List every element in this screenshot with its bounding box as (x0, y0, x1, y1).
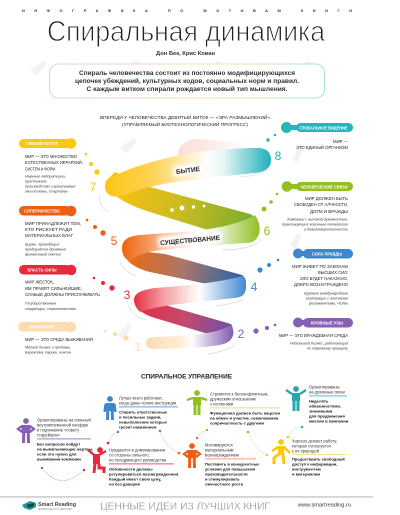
figure: green (187, 390, 207, 415)
panel: rivalry (5): предприятия дровяные (25, 248, 66, 252)
panel: human ties (6): МИР ДОЛЖЕН БЫТЬ (305, 196, 348, 202)
text: blue: и посильные задачи, (119, 414, 161, 420)
guide arrows (100, 168, 271, 354)
text: yellow: доступ к информации, (292, 462, 337, 466)
pill: СОПЕРНИЧЕСТВО (24, 208, 61, 214)
text: blue: когда даны четкие инструкции (119, 400, 176, 406)
logo: ЦЕННЫЕ ИДЕИ ИЗ ЛУЧШИХ КНИГ (38, 508, 73, 511)
panel: human ties (6) (282, 181, 353, 232)
numbers: 5 (111, 234, 118, 248)
text: green: на обмен и участие, немаловажна (210, 416, 279, 420)
panel: global vision (8) (281, 122, 353, 151)
text: green: Функционал должен быть нацелен (210, 410, 281, 416)
panel: human ties (6): и благотворительность (304, 228, 348, 232)
figure: teal (286, 386, 306, 411)
numbers: 3 (124, 288, 131, 302)
logo: Smart Reading (38, 502, 76, 508)
white dots (170, 205, 205, 212)
panel: power (3): ИМ ПРАВЯТ СИЛЬНЕЙШИЕ, (25, 284, 82, 292)
text: orange: Мотивируются (205, 442, 233, 448)
pill: ВЛАСТЬ СИЛЫ (28, 268, 56, 272)
text: teal: Наделять (309, 398, 329, 404)
text: purple: на выматывающие жертвы, (37, 446, 93, 452)
text: orange: и стимулировать (205, 476, 240, 482)
panel: flexible flow (7): престижное (25, 180, 47, 184)
ninth turn note: (УПРАВЛЯЕМЫЙ БИОТЕХНОЛОГИЧЕСКИЙ ПРОГРЕСС) (122, 120, 248, 128)
intro callout (50, 64, 324, 98)
text: yellow: инструментам (292, 466, 321, 472)
text: teal: для продвижения (309, 414, 346, 418)
numbers: 4 (251, 280, 258, 294)
text: orange: Поставить в конкурентные (205, 462, 260, 466)
label: being: БЫТИЕ (176, 166, 201, 176)
pill: СИЛА ПРАВДЫ (312, 252, 342, 256)
panel: power of truth (4): ВЫСШИХ СИЛ: (318, 270, 348, 276)
panel: power of truth (4) (292, 248, 353, 306)
text: red (109, 448, 179, 486)
text: green: сопричастность с другими (210, 420, 264, 426)
text: blue: грозит наказанием (119, 424, 157, 430)
panel: flexible flow (7): СИСТЕМ И ФОРМ (25, 166, 55, 172)
text: orange: вознаграждением (205, 452, 239, 458)
panel: power of truth (4): Крупные международные (304, 292, 348, 296)
text: red: регулироваться вознаграждением. (109, 472, 179, 476)
numbers (90, 149, 282, 354)
text: blue: Лучше всего работают, (119, 396, 163, 400)
title: Спиральная динамика (47, 16, 326, 48)
panel: rivalry (5): МИР ПРИНАДЛЕЖИТ ТЕМ, (25, 221, 81, 227)
pill: ГЛОБАЛЬНОЕ ВИДЕНИЕ (300, 126, 348, 130)
text: teal: миссии в компании (309, 418, 349, 424)
text: teal: Ориентированы (309, 384, 340, 390)
panel: power (3): структуры, строительство (25, 307, 76, 311)
panel: survival (1): Мелкий бизнес и продажа, (25, 346, 71, 350)
panel: power of truth (4): МИР ЖИВЕТ ПО ЗАКОНАМ (292, 264, 348, 270)
numbers: 2 (238, 327, 245, 341)
panel: rivalry (5): МАТЕРИАЛЬНЫХ БЛАГ (25, 233, 73, 239)
figure: blue (104, 396, 116, 420)
text: purple: внутриплеменной конфорк (37, 422, 88, 428)
panel: rivalry (5): финансовый сектор (25, 252, 61, 256)
numbers: 8 (275, 149, 282, 163)
panel: blood ties (2): Небольшой бизнес, работающий (290, 342, 348, 346)
heading: spiral management: СПИРАЛЬНОЕ УПРАВЛЕНИЕ (141, 374, 233, 380)
text: yellow: Хорошо делают работу, (292, 438, 337, 444)
text: yellow: с их природой (292, 448, 319, 454)
text: red: но поощряющего руководства (109, 458, 167, 462)
panel: blood ties (2) (279, 318, 353, 350)
text: teal: обязанностями, (309, 404, 341, 408)
footer slogan: ЦЕННЫЕ ИДЕИ ИЗ ЛУЧШИХ КНИГ (100, 500, 270, 512)
panel: global vision (8): МИР — (333, 139, 348, 145)
text: red: Обязанности должны (109, 466, 153, 472)
text: green: дружеским отношениям (210, 396, 256, 402)
intro callout: С каждым витком спирали рождается новый тип мышления. (86, 85, 288, 93)
connector dots (85, 134, 279, 341)
panel: blood ties (2): МИР — ЭТО ВРАЖДЕБНАЯ СРЕДА (279, 333, 349, 339)
panel: blood ties (2): по семейному принципу (307, 346, 349, 350)
panel: human ties (6): ДОГМ И ВРАЖДЫ (310, 209, 348, 215)
ninth turn note (100, 113, 270, 128)
ninth turn note: ВПЕРЕДИ У ЧЕЛОВЕЧЕСТВА ДЕВЯТЫЙ ВИТОК — «ЭРА РАЗМЫШЛЕНИЙ» (100, 113, 270, 121)
text: orange: материальным (205, 448, 234, 452)
text: orange: производительности (205, 472, 248, 476)
panel: power (3) (19, 265, 100, 311)
logo (22, 501, 76, 511)
text: yellow: которая согласуется (292, 444, 331, 448)
spiral (100, 139, 271, 354)
numbers: 7 (90, 180, 97, 194)
text: red: со стороны сильного, (109, 452, 150, 458)
text: yellow: Предоставить свободный (292, 456, 345, 462)
panel: survival (1): МИР — ЭТО СРЕДА ВЫЖИВАНИЯ (25, 337, 93, 343)
text: purple: Ориентированы на сильный (37, 418, 91, 422)
text: purple: если это нужно для (37, 452, 77, 456)
label: existence: СУЩЕСТВОВАНИЕ (160, 235, 221, 247)
text: yellow: и материалам (292, 472, 320, 476)
watermark marks (30, 60, 312, 340)
intro callout: Спираль человечества состоит из постоянно модифицирующихся (79, 70, 295, 77)
figure: purple (18, 418, 34, 443)
panel: flexible flow (7): Научные лаборатории, (25, 174, 66, 178)
panel: power of truth (4): ЗЛО БУДЕТ НАКАЗАНО, (300, 276, 348, 282)
text: purple: Без вопросов пойдут (37, 442, 80, 446)
intro callout: цепочек убеждений, культурных кодов, социальных норм и правил. (75, 77, 299, 85)
pill: ВЫЖИВАНИЕ (28, 324, 56, 330)
numbers: 6 (264, 224, 271, 238)
panel: survival (1) (18, 322, 93, 354)
label: being (173, 163, 203, 177)
panel: power of truth (4): регламентами, ЧОПы (308, 302, 348, 306)
text: orange: личностного роста (205, 482, 244, 486)
panel: flexible flow (7) (19, 138, 83, 194)
panel: global vision (8): ЭТО ЕДИНЫЙ ОРГАНИЗМ (296, 143, 348, 151)
panel: flexible flow (7): ЕСТЕСТВЕННЫХ ИЕРАРХИЙ, (25, 158, 83, 166)
footer url: www.smartreading.ru (297, 502, 351, 508)
text: green: Стремятся к бесконфликтным, (210, 392, 268, 396)
text: orange: условия для повышения (205, 466, 256, 472)
panel: survival (1): Барахолка, парики, кинсин (25, 350, 71, 354)
text: orange (205, 442, 260, 486)
panel: power (3): СЛАБЫЕ ДОЛЖНЫ ПРИСЛУЖИВАТЬ (25, 292, 100, 298)
panel: rivalry (5): Биржи, проводящие (25, 242, 59, 246)
figure: orange (184, 443, 200, 468)
text: red: но без доверия (109, 482, 141, 486)
panel: power (3): Государственные (25, 302, 56, 306)
panel: flexible flow (7): производство и креативные (25, 184, 75, 188)
text: teal: значимыми (309, 408, 333, 414)
text: purple: выживания компании (37, 456, 81, 462)
text: green (210, 392, 281, 426)
panel: flexible flow (7): МИР — ЭТО МНОЖЕСТВО (25, 154, 77, 160)
panel: human ties (6): практикующие холичные технологии (282, 222, 348, 226)
panel: flexible flow (7): экосистемы, стартапы (25, 190, 68, 194)
text: teal (309, 384, 349, 424)
panel: rivalry (5) (19, 206, 81, 256)
text: purple: старейшин» (37, 432, 61, 438)
figure: red (88, 447, 106, 473)
pill: КРОВНЫЕ УЗЫ (311, 320, 343, 326)
text: green: с коллегами (210, 402, 233, 406)
series label: ИНФОГРАФИКА ПО МОТИВАМ КНИГИ (22, 8, 352, 13)
text: purple (37, 418, 93, 462)
text: blue: Ставить ответственные (119, 410, 168, 414)
panel: rivalry (5): КТО РИСКУЕТ РАДИ (25, 227, 73, 233)
pill: ЧЕЛОВЕЧЕСКИЕ СВЯЗИ (300, 184, 348, 190)
text: red: Нуждаются в доминировании (109, 448, 165, 452)
text: blue (119, 396, 178, 430)
panel: power (3): МИР ЖЕСТОК, (25, 280, 54, 286)
connectors (41, 426, 303, 481)
text: teal: на духовные связи (309, 390, 345, 394)
panel: human ties (6): Компании с высокой духовностью, (287, 218, 348, 222)
text: purple: и подчинение «совету (37, 428, 80, 432)
text: blue: невыполнение которых (119, 420, 168, 424)
panel: human ties (6): СВОБОДЕН ОТ АЛЧНОСТИ, (294, 202, 348, 208)
text: yellow (292, 438, 347, 476)
panel: power of truth (4): корпорации с жесткими (306, 296, 348, 300)
numbers: 1 (135, 340, 142, 354)
pill: ГИБКИЙ ПОТОК (26, 141, 58, 146)
authors: Дон Бек, Крис Кован (156, 51, 215, 57)
panel: power of truth (4): ДОБРО ВОЗНАГРАЖДЕНО (294, 282, 348, 288)
text: red: Каждый имеет свою цену, (109, 476, 161, 482)
figure: yellow (272, 439, 290, 464)
